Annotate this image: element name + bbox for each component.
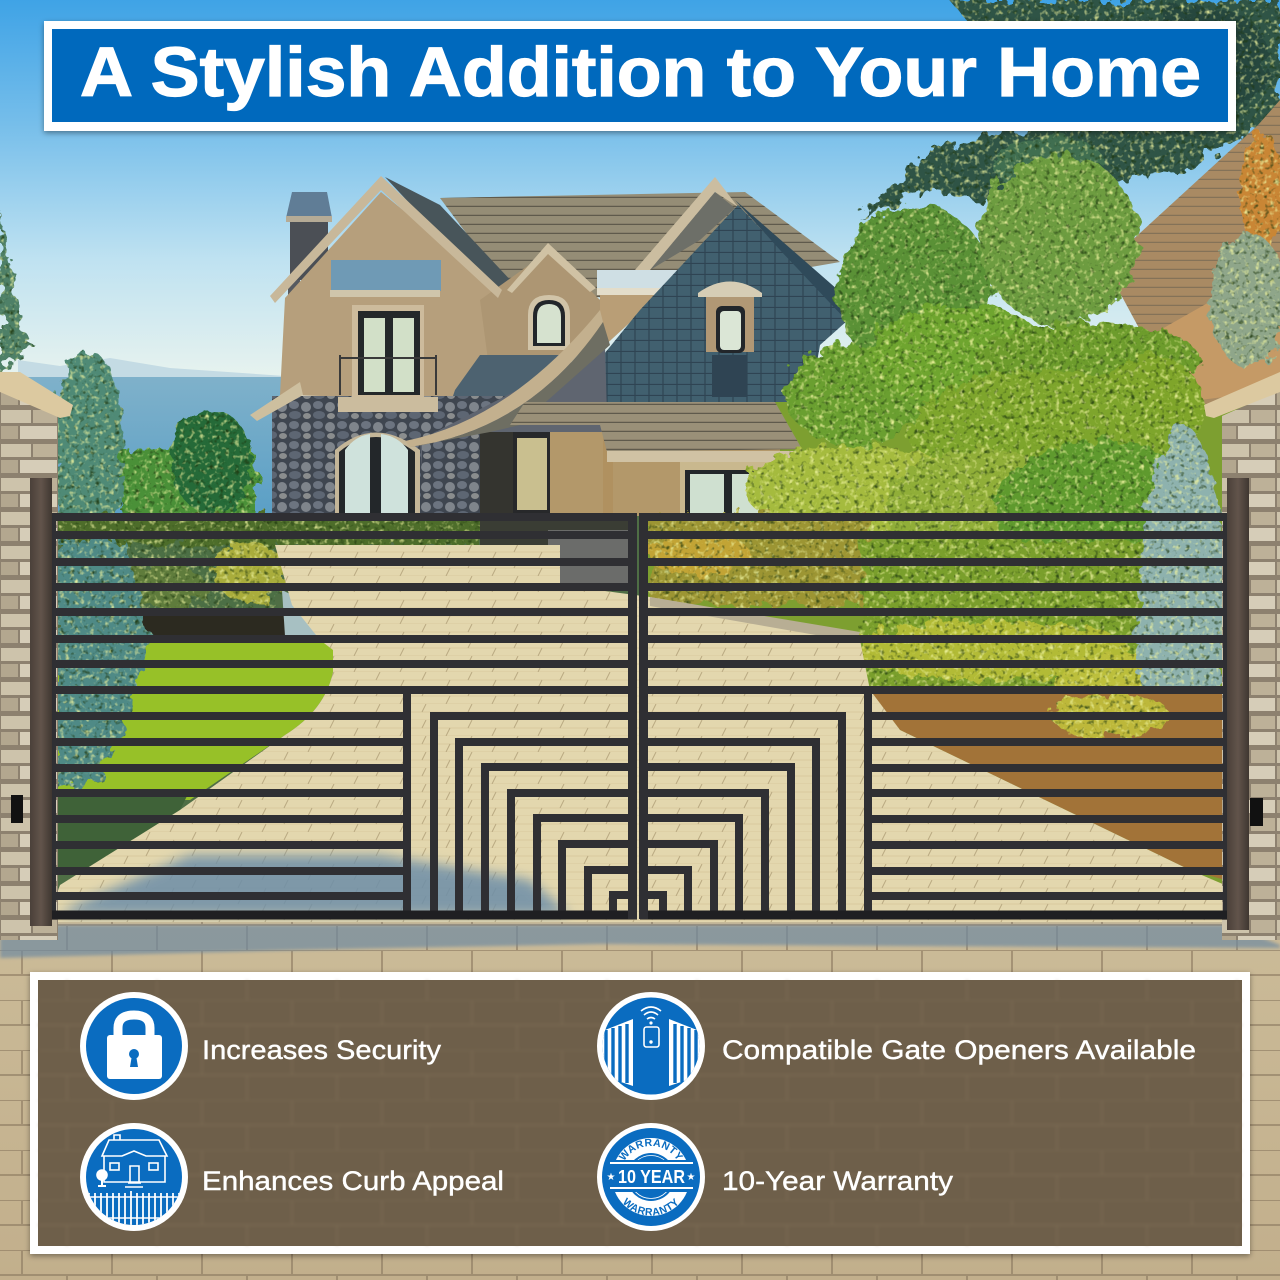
label: increases security: Increases Security — [202, 1035, 442, 1065]
brick pavement in front of gate — [0, 922, 1280, 1280]
ground: dirt bed, lawn and driveway — [45, 540, 1225, 925]
bright green trees — [650, 155, 1205, 737]
curved eave — [405, 310, 603, 447]
base greenery behind gate — [0, 400, 1280, 930]
icon: gate with remote and wifi — [597, 992, 705, 1100]
icon: house with fence — [80, 1123, 188, 1231]
icon: ten year warranty seal: WARRANTY — [624, 1197, 678, 1216]
right stone pillar — [1204, 372, 1280, 940]
chimney — [286, 192, 332, 385]
lower porch — [420, 345, 610, 515]
icon: ten year warranty seal: ★ — [687, 1172, 696, 1183]
neighbouring roof on the right — [1105, 100, 1280, 410]
icon: ten year warranty seal — [597, 1123, 705, 1231]
label: ten year warranty: 10-Year Warranty — [722, 1166, 954, 1196]
left stone pillar — [0, 372, 73, 940]
stone base — [272, 396, 510, 513]
back roof — [440, 192, 840, 300]
iron double gate — [11, 478, 1263, 930]
left trees and hedge — [0, 210, 480, 640]
icon: padlock — [80, 992, 188, 1100]
stone and dark gap below house — [480, 516, 630, 546]
upper windows — [338, 305, 438, 412]
icon: ten year warranty seal: 10 YEAR — [618, 1167, 685, 1187]
tan porch roof — [510, 402, 802, 452]
autumn and spruce foliage at right — [1139, 130, 1280, 815]
gate hinge posts — [11, 478, 1263, 930]
right gate leaf — [640, 513, 1227, 919]
gable trim — [270, 176, 502, 303]
arched window — [335, 432, 420, 513]
slate roof — [565, 205, 848, 402]
title text: A Stylish Addition to Your Home — [80, 33, 1201, 111]
icon: ten year warranty seal: ★ — [607, 1172, 616, 1183]
distant mountains and sea — [0, 358, 290, 517]
label: compatible gate openers: Compatible Gate Openers Available — [722, 1035, 1196, 1065]
icon: ten year warranty seal: WARRANTY — [618, 1138, 684, 1160]
metal awnings — [331, 260, 441, 291]
stucco walls — [280, 192, 605, 400]
left gate leaf — [52, 513, 637, 919]
features panel — [26, 970, 1254, 1260]
title banner — [44, 21, 1236, 131]
label: enhances curb appeal: Enhances Curb Appeal — [202, 1166, 504, 1196]
house — [250, 176, 848, 585]
dark pine trees upper right — [860, 0, 1280, 220]
